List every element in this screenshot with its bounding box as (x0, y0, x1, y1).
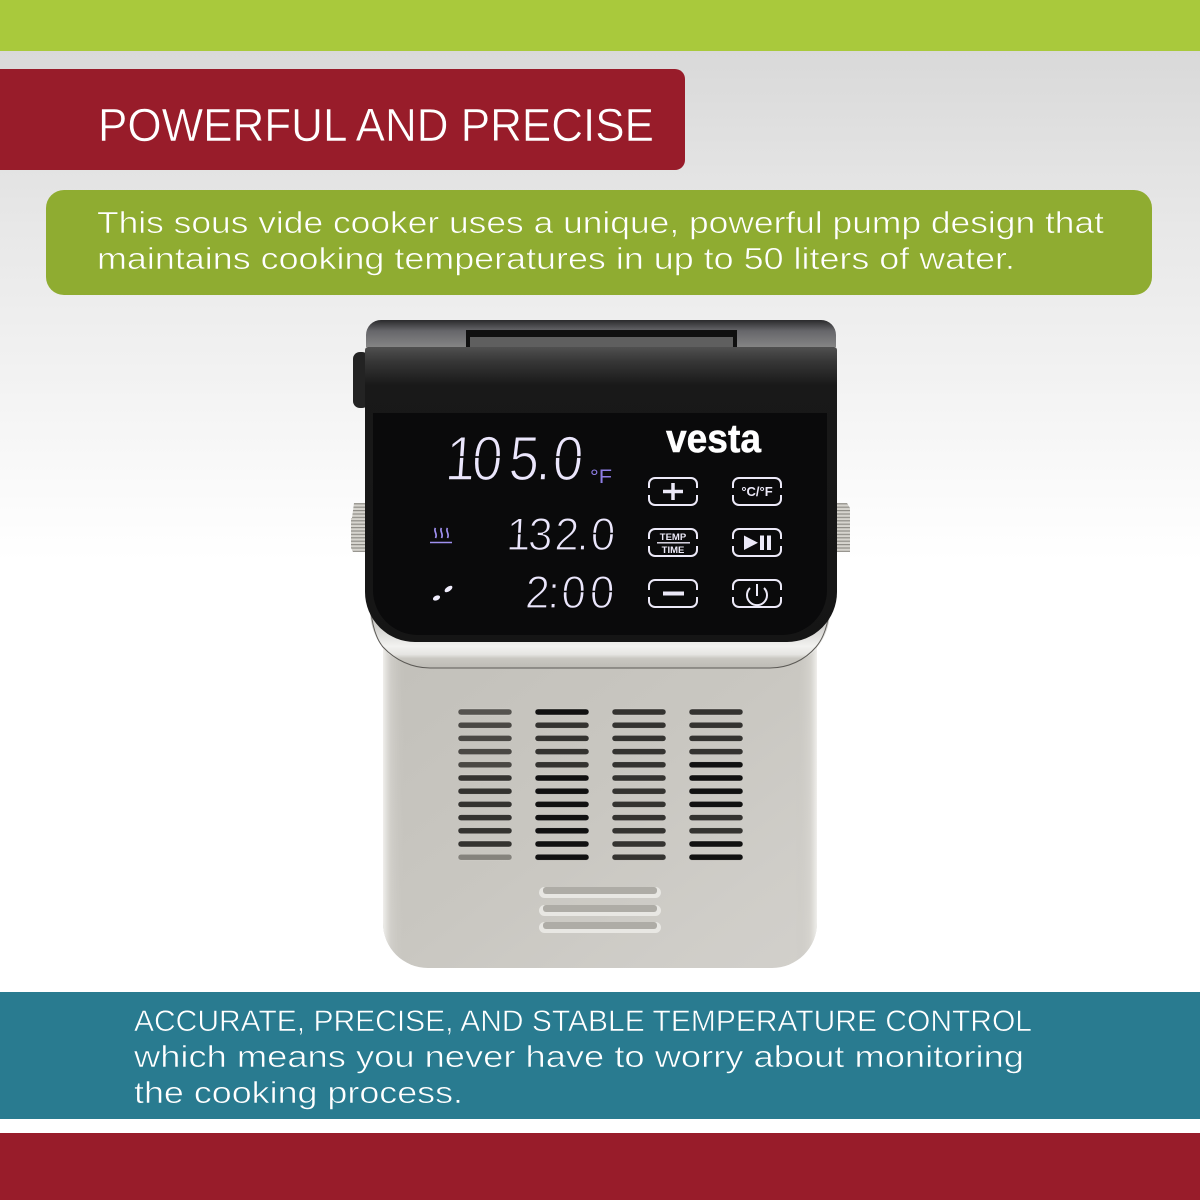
button: unit toggle: °C/°F (741, 484, 773, 499)
button: temp and time (649, 529, 697, 556)
left side knob (353, 352, 369, 408)
bottom red band (0, 1133, 1200, 1200)
title banner (0, 69, 685, 170)
rear hinge (366, 320, 836, 347)
display panel (373, 413, 827, 635)
top green band (0, 0, 1200, 51)
silver collar (370, 600, 830, 668)
product: sous vide cooker (351, 320, 850, 968)
side screws (351, 503, 850, 552)
intro text panel (46, 190, 1152, 295)
button: unit toggle (733, 478, 781, 505)
title banner: POWERFUL AND PRECISE (98, 99, 654, 151)
stainless steel body (383, 640, 817, 968)
button: plus (649, 478, 697, 505)
button: play and pause (733, 529, 781, 556)
background gradient (0, 51, 1200, 561)
button: temp and time: TEMP (660, 532, 687, 543)
control head (365, 347, 837, 642)
intro text panel: This sous vide cooker uses a unique, powerful pump design that (97, 205, 1104, 240)
readout: current temperature: 105.0 (443, 424, 586, 494)
button: power (733, 580, 781, 607)
button: minus (649, 580, 697, 607)
control text band: which means you never have to worry about monitoring (133, 1039, 1024, 1074)
intro text panel: maintains cooking temperatures in up to 50 liters of water. (97, 241, 1015, 276)
icon: timer indicator (432, 585, 454, 602)
icon: heating (430, 528, 452, 542)
button: temp and time: TIME (662, 545, 684, 556)
control text band: the cooking process. (134, 1075, 463, 1110)
brand logo: vesta (666, 417, 762, 461)
readout: current temperature: °F (590, 467, 612, 488)
control text band: ACCURATE, PRECISE, AND STABLE TEMPERATURE CONTROL (134, 1005, 1032, 1038)
readout: timer: 2:00 (524, 566, 616, 618)
readout: target temperature: 132.0 (505, 508, 617, 560)
control text band (0, 992, 1200, 1119)
